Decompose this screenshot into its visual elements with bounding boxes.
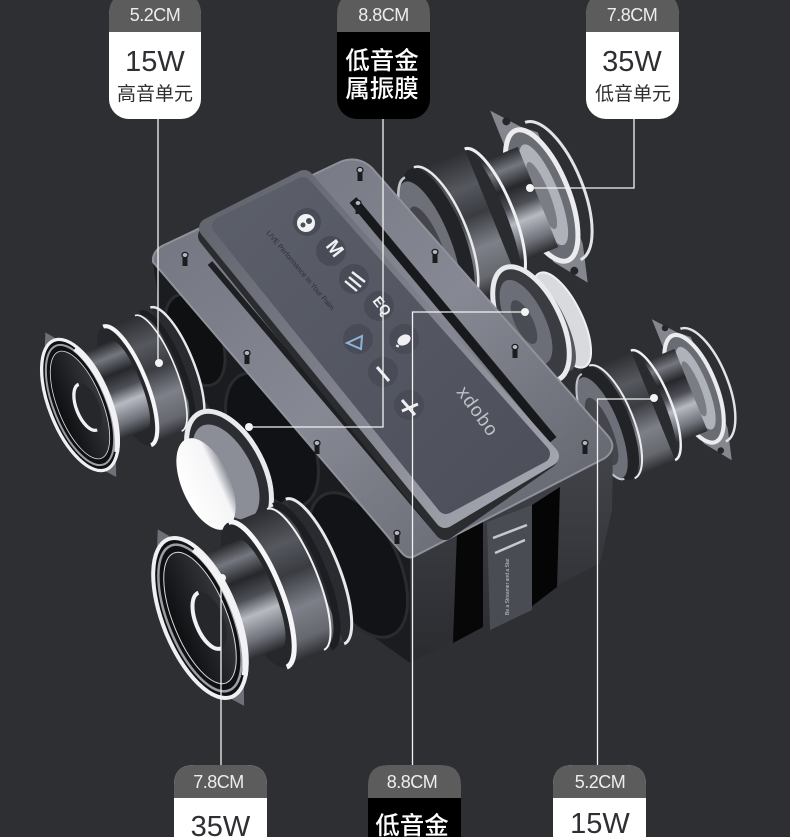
rear panel with label bbox=[487, 505, 532, 630]
card: top centre diaphragm: 低音金 bbox=[345, 47, 419, 75]
card: top left 15W: 高音单元 bbox=[117, 83, 193, 105]
callout: top centre line bbox=[245, 119, 383, 431]
opening: lower cavity bbox=[288, 477, 428, 653]
brand: xdobo bbox=[452, 383, 502, 441]
card: top right 35W: 7.8CM bbox=[607, 5, 657, 25]
control lid bbox=[208, 180, 549, 530]
callout: top right line bbox=[526, 119, 634, 192]
icon: lower right tweeter bbox=[555, 301, 756, 507]
card: bottom left 35W bbox=[174, 765, 267, 837]
button: mic bbox=[389, 324, 419, 354]
callout: top left line bbox=[155, 119, 163, 367]
speaker body bbox=[153, 160, 613, 663]
card: top right 35W bbox=[586, 0, 679, 119]
callout: bottom centre line bbox=[412, 308, 529, 766]
left side wall bbox=[153, 262, 410, 663]
opening: centre cavity bbox=[206, 359, 338, 521]
front slot right bbox=[527, 487, 560, 610]
button: wake bbox=[293, 208, 321, 236]
lid face bbox=[221, 186, 541, 505]
card: bottom right 15W: 5.2CM bbox=[575, 772, 625, 792]
card: bottom centre diaphragm bbox=[368, 765, 461, 837]
icon: right passive radiator bbox=[477, 255, 603, 393]
button: plus bbox=[394, 390, 424, 420]
callout: bottom left line bbox=[218, 574, 226, 766]
icon: left tweeter bbox=[22, 285, 223, 491]
opening: left cavity bbox=[153, 286, 237, 394]
black vent strip right bbox=[353, 200, 553, 440]
card: bottom left 35W: 7.8CM bbox=[193, 772, 244, 792]
card: top centre diaphragm: 属振膜 bbox=[345, 75, 419, 103]
button: M: M bbox=[321, 236, 347, 262]
callout: bottom right line bbox=[598, 394, 658, 766]
icon: upper right woofer bbox=[372, 89, 617, 340]
button: EQ: EQ bbox=[370, 293, 395, 319]
front slot left bbox=[453, 522, 483, 643]
black vent strip left bbox=[210, 263, 440, 535]
card: bottom centre diaphragm: 8.8CM bbox=[387, 772, 437, 792]
card: top centre diaphragm: 8.8CM bbox=[358, 5, 409, 25]
mounting posts bbox=[182, 167, 588, 544]
icon: lower left woofer bbox=[129, 472, 374, 723]
card: top right 35W: 35W bbox=[602, 46, 662, 78]
lid rim bbox=[209, 180, 549, 518]
button: play bbox=[343, 324, 373, 354]
front face bbox=[410, 450, 613, 663]
top face bbox=[153, 160, 612, 557]
button: III bbox=[339, 264, 369, 294]
lid underside bbox=[208, 188, 548, 530]
card: top right 35W: 低音单元 bbox=[595, 83, 671, 105]
icon: left passive radiator bbox=[164, 398, 289, 542]
card: top left 15W: 15W bbox=[125, 46, 185, 78]
card: top centre diaphragm bbox=[337, 0, 430, 119]
rear panel with label: Be a Streamer and a Star bbox=[505, 558, 511, 615]
card: top left 15W bbox=[109, 0, 201, 119]
card: top left 15W: 5.2CM bbox=[130, 5, 180, 25]
card: bottom right 15W bbox=[553, 765, 646, 837]
button: minus bbox=[368, 357, 398, 387]
tagline: LIVE Performance In Your Palm bbox=[264, 229, 337, 312]
